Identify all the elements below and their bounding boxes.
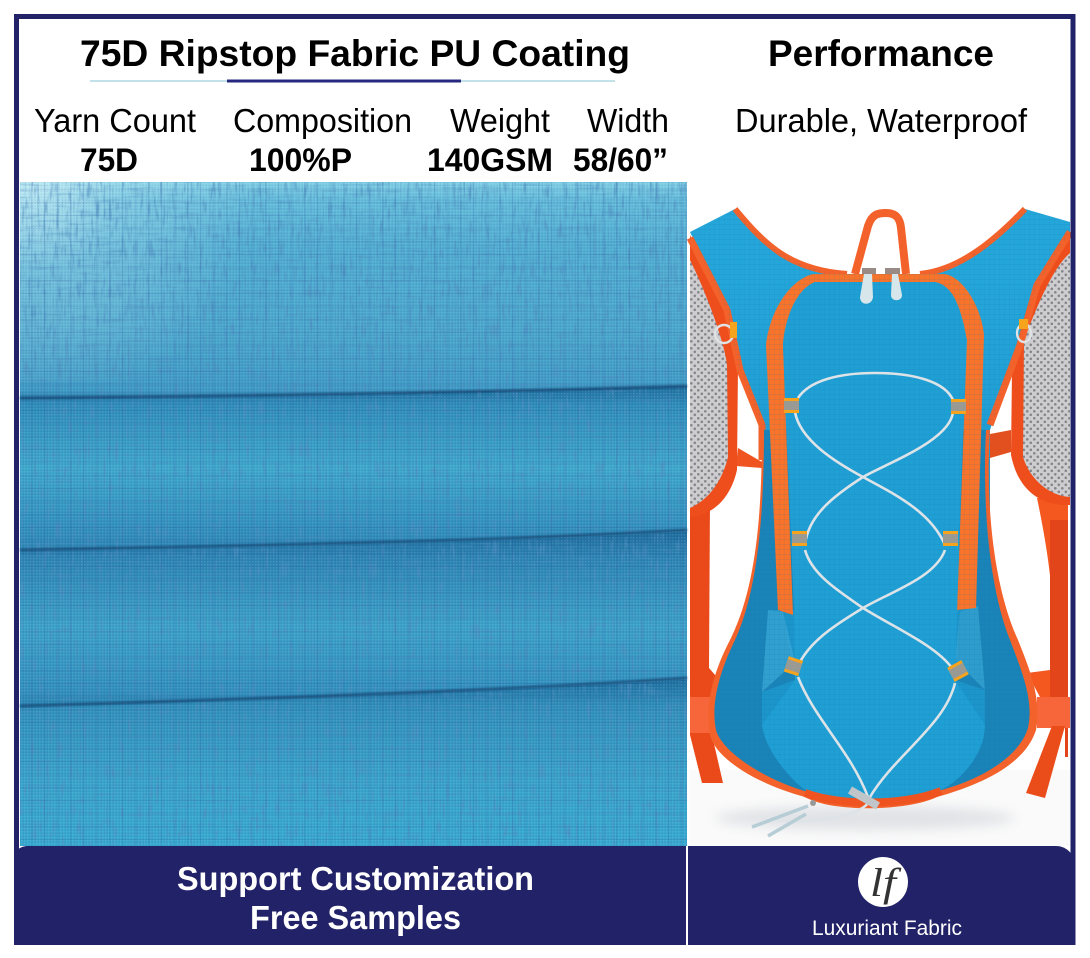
spec: composition bbox=[233, 102, 412, 178]
right lower harness strap bbox=[1026, 498, 1070, 798]
title underline bbox=[90, 80, 615, 82]
front panel bbox=[762, 274, 985, 804]
fabric fold 2 bbox=[20, 386, 687, 552]
spec: weight: 140GSM bbox=[427, 142, 553, 178]
spec: composition: 100%P bbox=[249, 142, 352, 178]
fabric fold 1 bbox=[20, 182, 687, 398]
footer left text: Free Samples bbox=[250, 899, 461, 936]
fabric fold 4 bbox=[20, 678, 687, 846]
reflective cord clips bbox=[784, 398, 969, 682]
shoulder buckles bbox=[715, 319, 1031, 343]
panel: fabric swatch photo bbox=[20, 182, 687, 846]
lower zipper pulls and cord lock bbox=[752, 790, 878, 836]
carry loop bbox=[855, 213, 906, 274]
spec: width bbox=[573, 102, 669, 178]
panel: backpack photo bbox=[690, 205, 1070, 846]
footer left text bbox=[177, 860, 534, 936]
footer left text: Support Customization bbox=[177, 860, 534, 897]
side connector straps bbox=[736, 430, 1011, 468]
panel: footer right bbox=[688, 846, 1074, 945]
performance description: Durable, Waterproof bbox=[735, 102, 1028, 139]
left mesh shoulder pad bbox=[690, 235, 738, 517]
left lower harness strap bbox=[690, 500, 728, 783]
spec: width: Width bbox=[587, 102, 669, 139]
backpack shoulders bbox=[690, 209, 1070, 560]
performance heading: Performance bbox=[768, 33, 994, 74]
shoulder orange piping bbox=[690, 209, 1070, 460]
backpack body bbox=[708, 430, 1038, 808]
icon: logo badge: lf bbox=[870, 860, 902, 905]
spec: composition: Composition bbox=[233, 102, 412, 139]
title: 75D Ripstop Fabric PU Coating bbox=[80, 33, 630, 74]
zipper pulls top bbox=[860, 268, 902, 304]
spec: yarn count bbox=[34, 102, 196, 178]
spec: yarn count: Yarn Count bbox=[34, 102, 196, 139]
elastic cord bbox=[775, 373, 955, 821]
spec: weight: Weight bbox=[450, 102, 550, 139]
spec: yarn count: 75D bbox=[80, 142, 138, 178]
spec: width: 58/60” bbox=[573, 142, 668, 178]
spec: weight bbox=[427, 102, 553, 178]
nylon ripstop texture bbox=[690, 205, 1070, 815]
brand name: Luxuriant Fabric bbox=[812, 917, 962, 940]
panel: footer left bbox=[14, 846, 686, 945]
right mesh shoulder pad bbox=[1011, 230, 1070, 505]
icon: logo badge bbox=[858, 857, 908, 907]
fabric fold 3 bbox=[20, 530, 687, 708]
bottom zipper bbox=[805, 791, 941, 803]
